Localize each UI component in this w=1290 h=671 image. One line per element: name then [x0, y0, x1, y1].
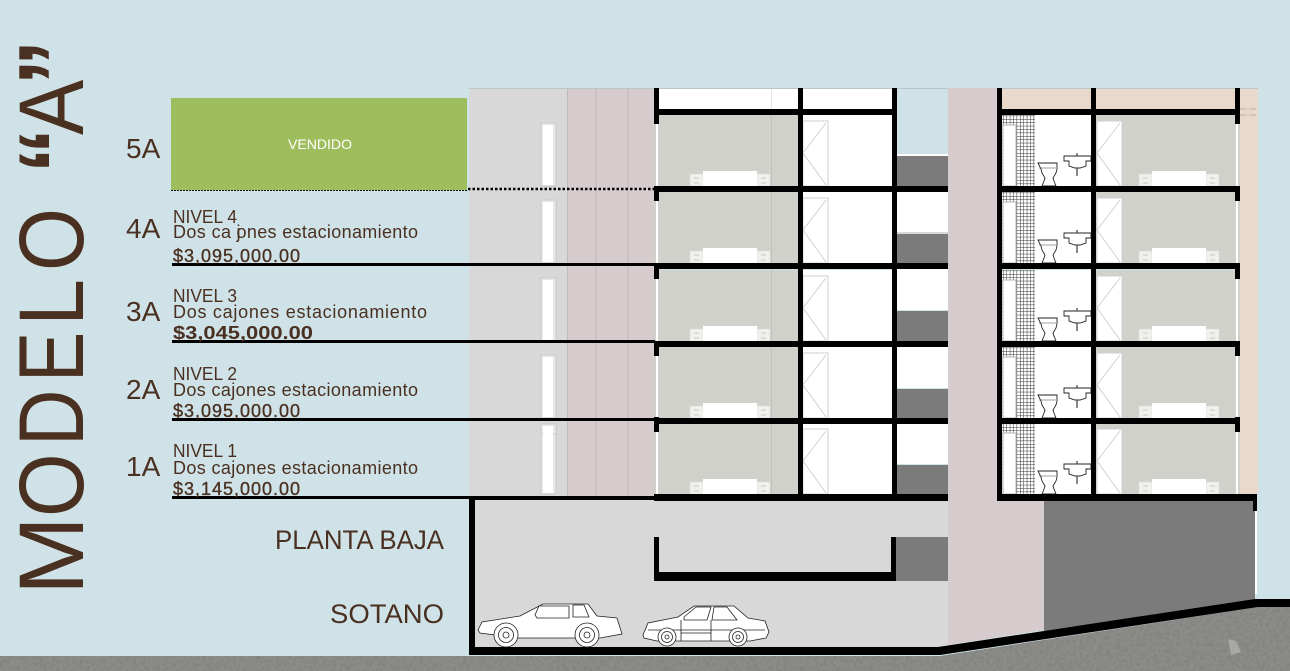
text block: nivel 2: Dos cajones estacionamiento [173, 380, 418, 400]
unit label 2A: 2A [126, 374, 161, 405]
text block: nivel 4: Dos ca [173, 222, 232, 242]
floor 4 rooms [541, 186, 1240, 263]
icon: car 2 [643, 606, 769, 646]
panel: beige rear facade [1002, 89, 1258, 494]
window extension floor 1 [541, 424, 556, 436]
text block: nivel 4: ones estacionamiento [236, 222, 418, 242]
title: D [1, 390, 103, 446]
floor 1 rooms [541, 417, 1240, 494]
unit label 1A: 1A [126, 451, 161, 482]
panel: sold unit 5A [171, 98, 468, 190]
icon: car 1 [478, 604, 622, 647]
structure: columns and slabs [469, 88, 1290, 655]
text block: nivel 1: Dos cajones estacionamiento [173, 458, 418, 478]
floor 2 rooms [541, 341, 1240, 418]
unit label 4A: 4A [126, 213, 161, 244]
label: planta baja: PLANTA BAJA [275, 525, 444, 555]
text block: nivel 2: NIVEL 2 [173, 364, 237, 384]
title: M [0, 516, 103, 595]
floor 3 rooms [541, 264, 1240, 341]
text block: nivel 3 [173, 286, 427, 343]
title [0, 40, 113, 595]
text block: nivel 3: $3,045,000.00 [173, 323, 313, 343]
label: vendido: VENDIDO [288, 136, 352, 152]
floor 5 rooms [541, 109, 1240, 186]
text block: nivel 3: NIVEL 3 [173, 286, 237, 306]
title: A [0, 79, 103, 135]
text block: nivel 1 [173, 441, 418, 499]
title: “ [0, 128, 113, 174]
text block: nivel 4: NIVEL 4 [173, 207, 237, 227]
unit label 3A: 3A [126, 296, 161, 327]
ground terrain [0, 607, 1290, 671]
text block: nivel 3: Dos cajones estacionamiento [173, 302, 427, 322]
building section [469, 88, 1290, 655]
text block: nivel 1: NIVEL 1 [173, 441, 237, 461]
text block: nivel 2 [173, 364, 418, 421]
title: E [0, 332, 103, 382]
label: sotano: SOTANO [330, 599, 444, 629]
unit label 5A: 5A [126, 133, 161, 164]
text block: nivel 4 [173, 207, 418, 266]
text block: nivel 1: $3,145,000.00 [173, 479, 300, 499]
panel: ground level and basement [470, 497, 948, 650]
title: O [1, 453, 103, 517]
title: ” [0, 40, 113, 86]
panel: central pillar [948, 88, 1044, 645]
panel: light well [897, 154, 948, 494]
panel: top white band [659, 89, 893, 109]
level divider lines [172, 189, 655, 499]
white strip on rear wall [1255, 511, 1257, 594]
text block: nivel 4: j [236, 222, 240, 242]
panel: dark retaining wall [1044, 500, 1255, 631]
text block: nivel 4: $3,095,000.00 [173, 246, 300, 266]
panel: left facade [469, 88, 1258, 497]
title: L [0, 279, 103, 326]
title: O [1, 208, 103, 271]
text block: nivel 2: $3,095,000.00 [173, 401, 300, 421]
